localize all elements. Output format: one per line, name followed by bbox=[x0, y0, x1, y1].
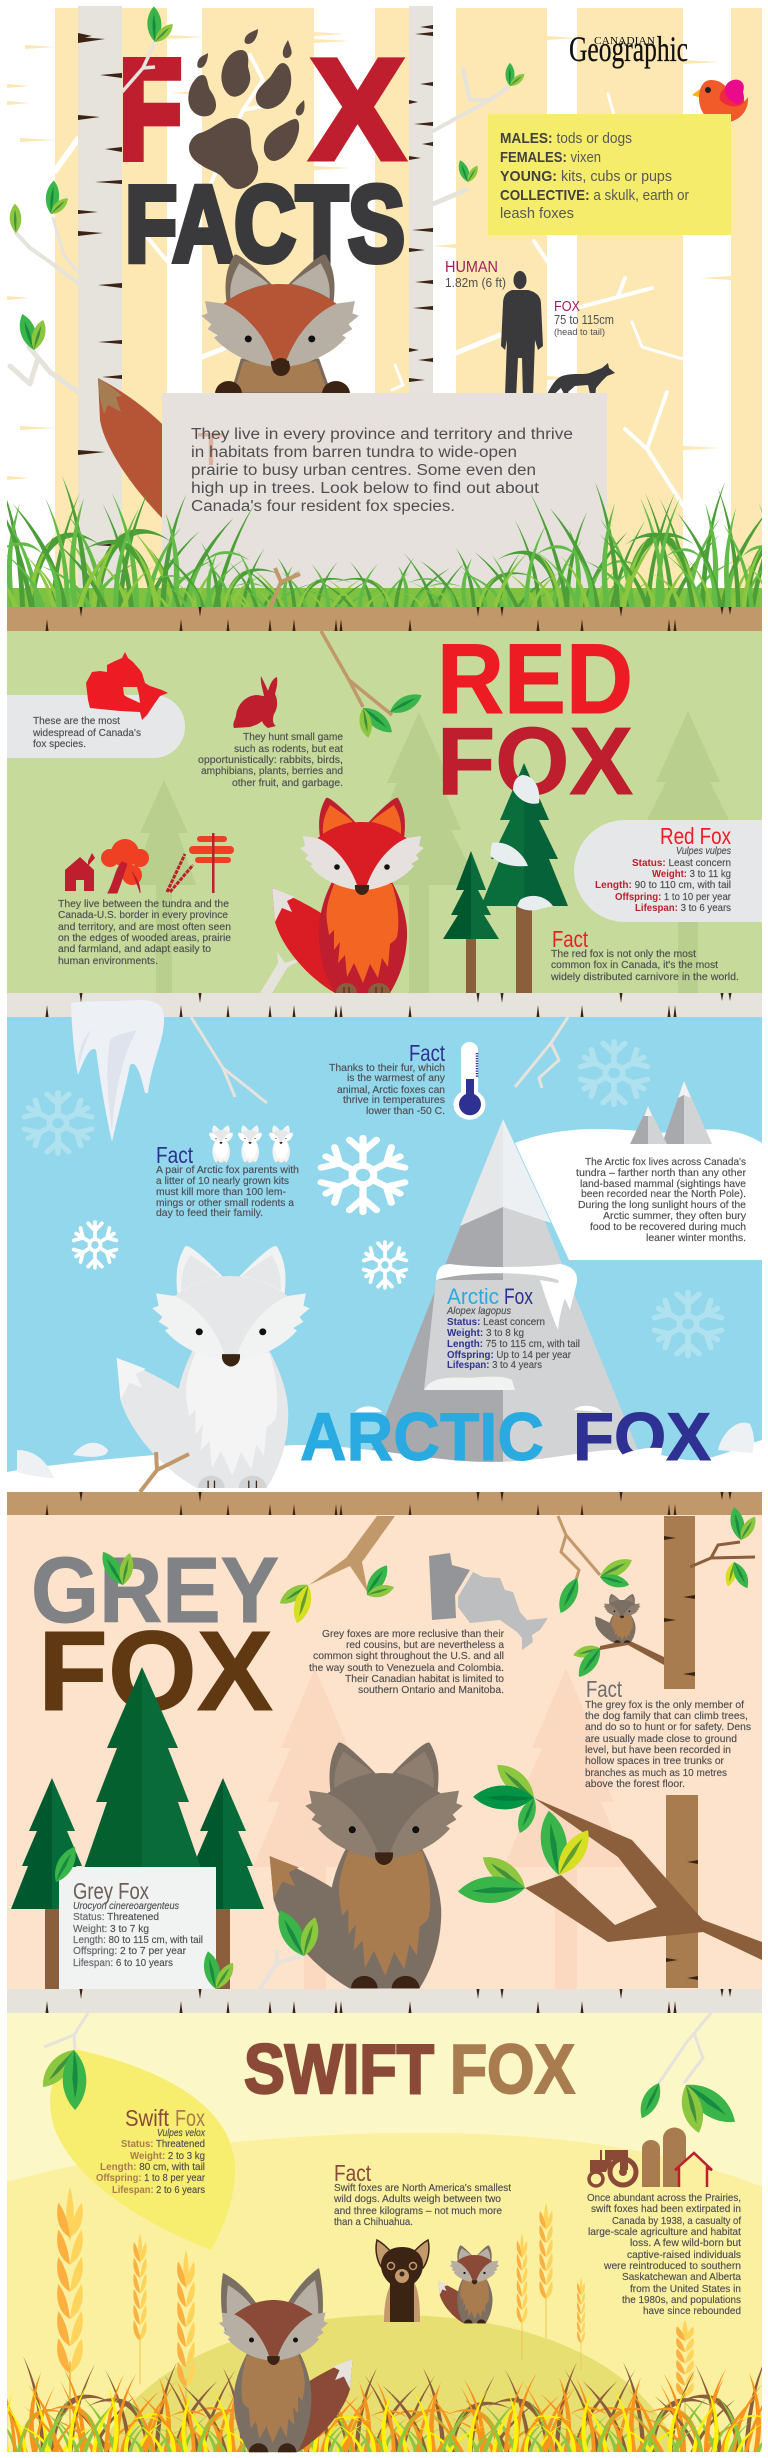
panel: red fox profile: Length: 90 to 110 cm, with tail bbox=[595, 879, 731, 891]
callout: widespread with Canada map: These are the most bbox=[33, 715, 120, 727]
snow ground bbox=[7, 1406, 762, 1492]
icon: rabbit and diet text: such as rodents, but eat bbox=[234, 743, 343, 755]
title: SWIFT FOX: SWIFT bbox=[244, 2030, 434, 2108]
panel: grey fox section bbox=[7, 1506, 762, 1992]
text: prairie history: captive-raised individuals bbox=[627, 2249, 741, 2261]
title: GREY FOX: FOX bbox=[38, 1608, 273, 1734]
text: habitat: They live between the tundra and the bbox=[58, 898, 229, 910]
dog and fox comparison bbox=[376, 2240, 499, 2323]
tree: lower right trunk with big branch bbox=[457, 1758, 762, 1988]
snow hill with tundra text: food to be recovered during much bbox=[590, 1221, 746, 1233]
text: fur fact: animal, Arctic foxes can bbox=[337, 1084, 445, 1096]
snowflakes bbox=[23, 1042, 723, 1355]
panel: swift fox profile leaf: Status: Threatened bbox=[121, 2138, 205, 2150]
panel: grey fox profile: Status: Threatened bbox=[73, 1911, 159, 1923]
title: ARCTIC FOX: ARCTIC bbox=[300, 1399, 544, 1475]
text: red fox fact bbox=[550, 926, 739, 983]
band: pale bark 1 bbox=[7, 993, 762, 1017]
callout: widespread with Canada map bbox=[7, 652, 185, 758]
title: FOX FACTS: X bbox=[310, 29, 405, 190]
text: climbing fact: branches as much as 10 metres bbox=[585, 1767, 727, 1779]
title: ARCTIC FOX bbox=[300, 1399, 711, 1475]
panel: red fox profile: Red Fox bbox=[660, 823, 731, 849]
text: climbing fact: The grey fox is the only member of bbox=[585, 1699, 744, 1711]
title: GREY FOX: GREY bbox=[31, 1538, 279, 1642]
grass: swift foreground bbox=[0, 2356, 768, 2452]
wheat stalks bbox=[57, 2187, 694, 2449]
leaves around pines bbox=[49, 1843, 238, 1992]
fox: mini grey fox on branch bbox=[595, 1594, 641, 1643]
panel: fox terminology: FEMALES: vixen bbox=[500, 149, 601, 166]
icon: rabbit and diet text: opportunistically: rabbits, birds, bbox=[198, 754, 343, 766]
twig behind grey fox bbox=[260, 1950, 304, 1989]
panel: grey fox profile: Offspring: 2 to 7 per year bbox=[73, 1945, 186, 1957]
prairie hills bbox=[7, 2133, 762, 2452]
text: climbing fact: above the forest floor. bbox=[585, 1778, 685, 1790]
panel: intro text bbox=[162, 393, 607, 590]
panel: grey fox profile: Length: 80 to 115 cm, with tail bbox=[73, 1934, 203, 1946]
panel: red fox section bbox=[7, 623, 762, 993]
panel: fox terminology: COLLECTIVE: a skulk, earth or bbox=[500, 187, 689, 204]
mountain with profile: Arctic bbox=[447, 1284, 499, 1309]
text: kits fact with kits: mings or other small rodents a bbox=[156, 1197, 294, 1209]
panel: swift fox section bbox=[0, 2013, 768, 2452]
text: prairie history: have since rebounded bbox=[643, 2305, 741, 2317]
text: fur fact: lower than -50 C. bbox=[366, 1105, 445, 1117]
logo: Canadian Geographic: Geographic bbox=[569, 29, 688, 69]
panel: swift fox profile leaf: Swift bbox=[125, 2105, 170, 2131]
title: SWIFT FOX bbox=[244, 2030, 575, 2108]
grass: intro foreground bbox=[0, 476, 768, 608]
map: Manitoba and Ontario bbox=[429, 1553, 548, 1650]
background trees bbox=[132, 711, 750, 993]
text: kits fact with kits bbox=[156, 1125, 299, 1219]
icon: rabbit and diet text bbox=[198, 676, 343, 789]
text: prairie history: Canada by 1938, a casualty of bbox=[612, 2215, 741, 2227]
twig rising from band bbox=[270, 568, 300, 608]
title: RED FOX bbox=[437, 623, 633, 815]
branches: tan twigs with leaves bbox=[276, 1516, 635, 1626]
text: prairie history: Once abundant across the Prairies, bbox=[587, 2192, 741, 2204]
text: size fact: wild dogs. Adults weigh between two bbox=[333, 2193, 501, 2205]
snow hill with tundra text: leaner winter months. bbox=[646, 1232, 746, 1244]
text: prairie history: from the United States in bbox=[630, 2283, 741, 2295]
text: size fact: than a Chihuahua. bbox=[334, 2216, 413, 2228]
panel: intro text: prairie to busy urban centres. Some even den bbox=[191, 462, 536, 479]
panel: intro text: Canada's four resident fox species. bbox=[191, 498, 455, 515]
snow hill with tundra text: tundra – farther north than any other bbox=[576, 1167, 746, 1179]
panel: grey fox profile: Urocyon cinereoargenteus bbox=[73, 1900, 180, 1912]
panel: grey fox profile bbox=[59, 1867, 216, 1989]
snow hill with tundra text: During the long sunlight hours of the bbox=[578, 1199, 746, 1211]
panel: swift fox profile leaf: Lifespan: 2 to 6 years bbox=[112, 2184, 205, 2196]
twig and leaves over title bbox=[122, 6, 176, 92]
size comparison: human and fox: (head to tail) bbox=[554, 327, 605, 338]
text: habitat: Canada-U.S. border in every province bbox=[58, 909, 228, 921]
panel: red fox profile: Vulpes vulpes bbox=[676, 845, 732, 857]
icon: chihuahua bbox=[376, 2240, 429, 2322]
tree trunk: centre birch bbox=[409, 6, 433, 394]
size comparison: human and fox: FOX bbox=[554, 298, 580, 315]
branches: birch twigs bbox=[10, 69, 507, 392]
text: fur fact: thrive in temperatures bbox=[343, 1094, 445, 1106]
leaves on title bbox=[97, 1548, 136, 1589]
text: habitat: and territory, and are most often seen bbox=[58, 921, 231, 933]
panel: red fox profile: Lifespan: 3 to 6 years bbox=[635, 902, 731, 914]
panel: red fox profile: Offspring: 1 to 10 per year bbox=[615, 891, 731, 903]
text: red fox fact: common fox in Canada, it's the most bbox=[551, 959, 718, 971]
text: fur fact: is the warmest of any bbox=[347, 1072, 446, 1084]
callout: widespread with Canada map: fox species. bbox=[33, 738, 86, 750]
text: grey fox range: common sight throughout the U.S. and all bbox=[313, 1650, 504, 1662]
text: habitat: and farmland, and adapt easily to bbox=[58, 943, 211, 955]
branch with leaves bbox=[321, 631, 425, 739]
panel: red fox profile: Weight: 3 to 11 kg bbox=[652, 868, 731, 880]
pine trees bbox=[11, 1667, 264, 1989]
panel: intro text: in habitats from barren tundra to wide-open bbox=[191, 444, 517, 461]
title: RED FOX: FOX bbox=[437, 708, 633, 815]
panel: arctic fox section bbox=[7, 1000, 762, 1492]
text: grey fox range: Grey foxes are more reclusive than their bbox=[322, 1628, 504, 1640]
text: grey fox range: Their Canadian habitat is limited to bbox=[345, 1673, 504, 1685]
text: grey fox range bbox=[309, 1628, 504, 1696]
callout: widespread with Canada map: widespread of Canada's bbox=[32, 727, 141, 739]
text: prairie history: loss. A few wild-born but bbox=[630, 2237, 741, 2249]
icon: rabbit and diet text: other fruit, and garbage. bbox=[232, 777, 343, 789]
band: brown bark 2 bbox=[7, 1492, 762, 1516]
fox: peeking intro fox bbox=[201, 254, 359, 394]
text: size fact: Fact bbox=[334, 2160, 372, 2186]
mountain with profile: Offspring: Up to 14 per year bbox=[447, 1349, 571, 1361]
branch with leaves bbox=[635, 2013, 742, 2135]
size comparison: human and fox: 1.82m (6 ft) bbox=[445, 275, 506, 290]
mountain with profile: Lifespan: 3 to 4 years bbox=[447, 1359, 542, 1371]
title: FOX FACTS bbox=[119, 29, 405, 284]
fox: small swift fox bbox=[438, 2245, 499, 2323]
fox: grey fox bbox=[270, 1742, 463, 1988]
size comparison: human and fox bbox=[445, 259, 615, 402]
mountain with profile: Status: Least concern bbox=[447, 1316, 545, 1328]
text: size fact: and three kilograms – not much more bbox=[334, 2205, 502, 2217]
snow hill with tundra text bbox=[515, 1081, 762, 1260]
text: size fact: Swift foxes are North America's smallest bbox=[334, 2182, 511, 2194]
text: size fact bbox=[333, 2160, 511, 2228]
icon: paw print bbox=[188, 29, 305, 189]
panel: red fox profile: Status: Least concern bbox=[632, 857, 731, 869]
panel: swift fox profile leaf: Vulpes velox bbox=[157, 2127, 206, 2139]
twig behind fox bbox=[260, 952, 312, 993]
title: FOX FACTS: FACTS bbox=[125, 164, 405, 284]
icon: bird bbox=[692, 80, 748, 123]
icons: tractor, silos, barn bbox=[589, 2128, 712, 2187]
icicles bbox=[71, 1000, 164, 1142]
panel: swift fox profile leaf bbox=[36, 2013, 235, 2250]
text: prairie history: swift foxes had been extirpated in bbox=[591, 2203, 741, 2215]
panel: intro forest bbox=[7, 8, 762, 608]
icon: thermometer bbox=[454, 1042, 486, 1120]
panel: fox terminology bbox=[488, 114, 731, 235]
text: kits fact with kits: must kill more than 100 lem- bbox=[156, 1186, 286, 1198]
text: red fox fact: Fact bbox=[552, 926, 588, 952]
text: red fox fact: The red fox is not only the most bbox=[551, 948, 696, 960]
text: climbing fact: the dog family that can climb trees, bbox=[585, 1710, 748, 1722]
fox tail bbox=[98, 378, 162, 518]
icon: rabbit and diet text: amphibians, plants, berries and bbox=[201, 765, 343, 777]
text: prairie history: large-scale agriculture and habitat bbox=[588, 2226, 741, 2238]
snow hill with tundra text: Arctic summer, they often bury bbox=[603, 1210, 747, 1222]
tree trunk: left birch bbox=[78, 6, 122, 606]
panel: intro text: high up in trees. Look below to find out about bbox=[191, 480, 540, 497]
text: grey fox range: southern Ontario and Manitoba. bbox=[358, 1684, 504, 1696]
text: grey fox range: red cousins, but are nevertheless a bbox=[346, 1639, 504, 1651]
fox: swift fox bbox=[219, 2268, 353, 2452]
panel: fox terminology: YOUNG: kits, cubs or pups bbox=[500, 168, 672, 185]
twig at arctic fox bbox=[140, 1452, 189, 1492]
text: climbing fact: hollow spaces in tree trunks or bbox=[585, 1755, 724, 1767]
panel: fox terminology: MALES: tods or dogs bbox=[500, 130, 632, 147]
branches: bare twigs bbox=[191, 1017, 568, 1103]
fox: red fox bbox=[272, 798, 424, 993]
panel: swift fox profile leaf: Fox bbox=[175, 2105, 205, 2131]
panel: swift fox profile leaf: Length: 80 cm, with tail bbox=[100, 2161, 205, 2173]
title: GREY FOX bbox=[31, 1538, 279, 1734]
panel: red fox profile bbox=[574, 820, 762, 922]
text: kits fact with kits: day to feed their family. bbox=[156, 1207, 263, 1219]
text: climbing fact bbox=[585, 1676, 751, 1790]
text: habitat: on the edges of wooded areas, prairie bbox=[58, 932, 231, 944]
text: prairie history: were reintroduced to southern bbox=[603, 2260, 741, 2272]
text: kits fact with kits: Fact bbox=[156, 1142, 194, 1168]
text: prairie history: Saskatchewan and Alberta bbox=[622, 2271, 741, 2283]
band: pale bark 2 bbox=[7, 1989, 762, 2013]
tree: upper right trunk with branches and leaves bbox=[572, 1506, 760, 1689]
panel: grey fox profile: Grey Fox bbox=[73, 1878, 149, 1904]
panel: grey fox profile: Weight: 3 to 7 kg bbox=[73, 1923, 149, 1935]
text: habitat bbox=[58, 898, 231, 967]
panel: grey fox profile: Lifespan: 6 to 10 years bbox=[73, 1957, 173, 1969]
panel: intro text: T bbox=[197, 423, 225, 475]
size comparison: human and fox: 75 to 115cm bbox=[554, 312, 614, 327]
mountain with profile: Weight: 3 to 8 kg bbox=[447, 1327, 524, 1339]
pine trees with snow bbox=[443, 763, 568, 993]
title: RED FOX: RED bbox=[437, 623, 633, 734]
title: ARCTIC FOX: FOX bbox=[573, 1399, 711, 1475]
icons: habitat house, trees, wheat bbox=[65, 833, 234, 893]
text: fur fact: Thanks to their fur, which bbox=[329, 1062, 445, 1074]
leaves over fox tail bbox=[271, 1906, 323, 1961]
text: fur fact bbox=[329, 1040, 446, 1117]
panel: swift fox profile leaf: Offspring: 1 to 8 per year bbox=[96, 2172, 205, 2184]
background trees bbox=[253, 1668, 628, 1989]
fox: arctic fox bbox=[117, 1246, 310, 1488]
text: climbing fact: level, but have been recorded in bbox=[585, 1744, 731, 1756]
panel: fox terminology: leash foxes bbox=[500, 205, 574, 222]
text: fur fact: Fact bbox=[409, 1040, 445, 1066]
mountain with profile: Alopex lagopus bbox=[446, 1305, 512, 1317]
text: kits fact with kits: a litter of 10 nearly grown kits bbox=[156, 1175, 289, 1187]
snow hill with tundra text: been recorded near the North Pole). bbox=[581, 1188, 746, 1200]
snow hill with tundra text: land-based mammal (sightings have bbox=[580, 1178, 746, 1190]
snow hill with tundra text: The Arctic fox lives across Canada's bbox=[585, 1156, 746, 1168]
mountain with profile: Length: 75 to 115 cm, with tail bbox=[447, 1338, 580, 1350]
band: brown bark 1 bbox=[7, 607, 762, 631]
text: prairie history: the 1980s, and populations bbox=[622, 2294, 741, 2306]
panel: swift fox profile leaf: Weight: 2 to 3 kg bbox=[130, 2150, 205, 2162]
text: climbing fact: and do so to hunt or for safety. Dens bbox=[585, 1721, 751, 1733]
size comparison: human and fox: HUMAN bbox=[445, 259, 498, 276]
text: kits fact with kits: A pair of Arctic fox parents with bbox=[156, 1164, 299, 1176]
logo: Canadian Geographic: CANADIAN bbox=[594, 36, 655, 47]
text: grey fox range: the way south to Venezuela and Colombia. bbox=[309, 1662, 504, 1674]
panel: intro text: They live in every province and territory and thrive bbox=[191, 426, 573, 443]
mountain with profile: Fox bbox=[504, 1284, 533, 1309]
title: SWIFT FOX: FOX bbox=[450, 2030, 575, 2108]
icon: rabbit and diet text: They hunt small game bbox=[243, 731, 343, 743]
text: habitat: human environments. bbox=[58, 955, 158, 967]
text: climbing fact: are usually made close to ground bbox=[585, 1733, 737, 1745]
mountain with profile bbox=[360, 1119, 650, 1480]
text: red fox fact: widely distributed carnivore in the world. bbox=[550, 971, 739, 983]
text: prairie history bbox=[587, 2192, 741, 2317]
text: climbing fact: Fact bbox=[586, 1676, 622, 1702]
title: FOX FACTS: F bbox=[119, 30, 182, 188]
leaves: intro forest bbox=[9, 63, 527, 352]
